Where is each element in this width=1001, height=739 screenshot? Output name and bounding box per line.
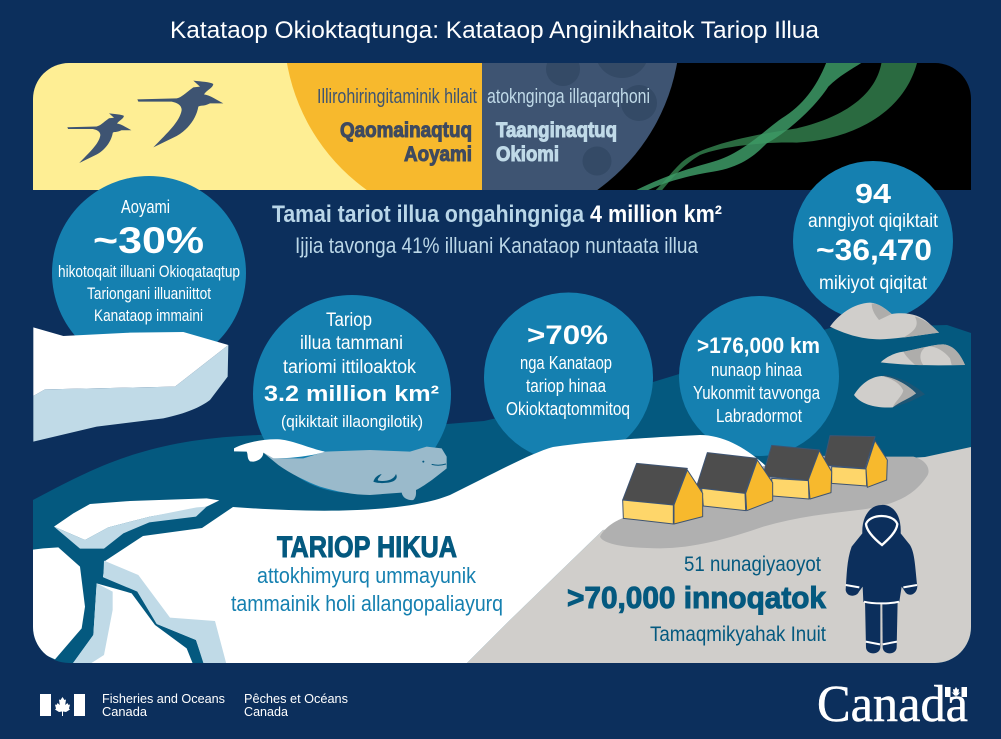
text: winter label — [496, 121, 616, 162]
text: twilight caption left: Illirohiringitaminik hilait — [317, 86, 477, 108]
text: winter label: Taanginaqtuq — [496, 119, 617, 142]
rocks — [830, 303, 965, 408]
text: total marine area heading: 4 million km² — [590, 201, 722, 228]
text: coastline share stat: >70% — [527, 320, 608, 350]
icon: person in parka — [846, 505, 917, 653]
text: ice coverage stat: Kanataop immaini — [94, 306, 203, 325]
text: coastline length stat — [693, 333, 821, 426]
text: summer label: Qaomainaqtuq — [340, 119, 472, 142]
text: ice coverage stat: ~30% — [93, 220, 204, 261]
text: ice coverage stat: Tariongani illuaniittot — [87, 284, 211, 303]
text: department name English: Canada — [102, 704, 148, 719]
houses — [623, 436, 887, 524]
grey land — [467, 447, 971, 663]
icon: beluga whale — [234, 439, 447, 500]
circle: marine area — [253, 295, 451, 493]
white sea ice — [103, 435, 800, 663]
icon: sun — [287, 63, 482, 190]
text: summer label: Aoyami — [404, 143, 472, 166]
title: Katataop Okioktaqtunga: Katataop Anginikhaitok Tariop Illua — [170, 17, 820, 44]
icon: house 2 — [696, 453, 773, 511]
panel: sky — [33, 63, 971, 190]
text: islands stat: anngiyot qiqiktait — [808, 211, 939, 232]
text: communities: 51 nunagiyaoyot — [684, 553, 821, 576]
icons: birds — [67, 81, 223, 163]
text: islands stat: ~36,470 — [816, 234, 932, 267]
text: sea ice description: tammainik holi allangopaliayurq — [231, 591, 503, 616]
text: coastline length stat: nunaop hinaa — [711, 360, 803, 380]
text: population: >70,000 innoqatok — [567, 580, 827, 615]
icon: Canadian flag signature — [40, 694, 85, 716]
text: sea ice description — [231, 563, 503, 616]
icon: rock 1 — [830, 303, 939, 339]
text: coastline share stat — [506, 320, 630, 419]
text: department name French: Canada — [244, 704, 289, 719]
text: coastline length stat: >176,000 km — [697, 333, 820, 358]
text: islands stat: 94 — [855, 178, 891, 209]
text: department name English: Fisheries and Oceans — [102, 691, 225, 706]
icon: moon — [482, 63, 677, 190]
text: coastline share stat: nga Kanataop — [520, 353, 612, 373]
icon: house 1 — [623, 463, 703, 524]
text: coastline share stat: tariop hinaa — [526, 376, 607, 396]
sea — [33, 325, 971, 663]
circle: coastline length — [679, 296, 839, 456]
icon: house 4 — [823, 436, 887, 487]
text: sea ice description: attokhimyurq ummayunik — [257, 563, 477, 588]
text: department name French — [244, 691, 348, 719]
text: marine area stat: tariomi ittiloaktok — [283, 357, 416, 378]
circle: ice coverage — [52, 176, 246, 342]
text: subheading: Ijjia tavonga 41% illuani Kanataop nuntaata illua — [295, 233, 699, 258]
text: Inuit homeland: Tamaqmikyahak Inuit — [650, 623, 826, 646]
text: ice coverage stat: hikotoqait illuani Okioqataqtup — [58, 262, 240, 281]
text: marine area stat — [264, 310, 439, 431]
text: coastline length stat: Labradormot — [716, 406, 802, 426]
text: twilight caption right: atoknginga illaqarqhoni — [487, 86, 650, 108]
text: department name French: Pêches et Océans — [244, 691, 348, 706]
text: coastline length stat: Yukonmit tavvonga — [693, 383, 821, 403]
logo: Canada wordmark: Canada — [817, 676, 968, 733]
icon: house 3 — [763, 445, 832, 499]
text: marine area stat: Tariop — [326, 310, 372, 331]
icon: rock 3 — [854, 375, 925, 408]
text: marine area stat: illua tammani — [300, 333, 403, 354]
panel: main illustration — [33, 63, 971, 663]
text: islands stat — [808, 178, 939, 294]
text: ice coverage stat: Aoyami — [121, 197, 170, 217]
text: winter label: Okiomi — [496, 143, 559, 166]
text: ice coverage stat — [58, 197, 240, 325]
icon: small bird — [67, 113, 131, 163]
circle: islands — [793, 161, 953, 321]
ice shelf — [33, 327, 228, 442]
dark shore — [600, 456, 929, 548]
text: total marine area heading: Tamai tariot illua ongahingniga — [272, 201, 585, 228]
text: department name English — [102, 691, 225, 719]
text: coastline share stat: Okioktaqtommitoq — [506, 399, 630, 419]
text: islands stat: mikiyot qiqitat — [819, 273, 928, 294]
text: marine area stat: 3.2 million km² — [264, 381, 439, 406]
icon: large bird — [137, 81, 223, 147]
ice floes and cracks — [30, 498, 227, 665]
text: sea ice heading: TARIOP HIKUA — [277, 531, 457, 564]
text: summer label — [340, 119, 472, 166]
aurora — [635, 62, 917, 191]
text: marine area stat: (qikiktait illaongilotik) — [281, 412, 423, 431]
icon: rock 2 — [881, 344, 965, 365]
circle: coastline share — [484, 292, 653, 462]
